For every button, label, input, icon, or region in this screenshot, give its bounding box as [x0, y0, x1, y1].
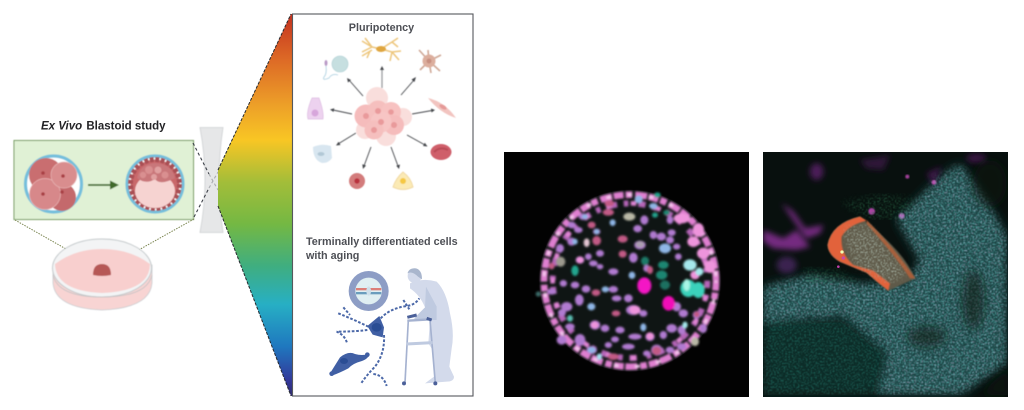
icon: blue epithelial cell [313, 145, 332, 163]
icon: yellow cell [393, 172, 413, 190]
panel: fate outcomes [292, 14, 473, 396]
panel: blastoid development box [14, 140, 194, 220]
icon: blastocyst in zona [127, 156, 183, 212]
speckled cells [763, 163, 1007, 395]
icon: degenerating neuron [337, 298, 419, 386]
icon: muscle cell [428, 98, 456, 118]
icon: stem cell cluster [354, 87, 412, 146]
purple streaks [763, 154, 987, 273]
rim dashes [544, 195, 716, 367]
aging illustration [329, 268, 454, 386]
icon: glial cell [419, 50, 441, 73]
pluripotency diagram [308, 38, 456, 190]
dotted lines: box to dish [15, 219, 194, 266]
dashed lines: box through lens [193, 143, 218, 217]
heading: Terminally differentiated cells with aging: with aging [305, 250, 359, 262]
bright magenta nuclei [637, 277, 651, 294]
dim tissue haze [763, 320, 887, 395]
arrow: development [88, 180, 119, 190]
icon: elderly man with walker [402, 268, 454, 385]
icon: red round cell [349, 173, 365, 189]
title: Ex Vivo Blastoid study: Ex Vivo Blastoid study [41, 120, 166, 132]
icon: damaged blue cell [329, 352, 370, 376]
icon: purple cell [308, 98, 323, 119]
icon: red blood cell [430, 144, 452, 160]
icon: egg and sperm [324, 56, 348, 79]
icon: microscope lens [200, 128, 223, 232]
spectrum funnel [218, 14, 293, 396]
icon: neuron [362, 38, 401, 61]
icon: membrane in cell [349, 271, 389, 311]
heading: Terminally differentiated cells with aging: Terminally differentiated cells [306, 236, 458, 248]
icon: morula in zona [26, 156, 82, 212]
icon: petri dish [52, 239, 152, 310]
dark folds [902, 160, 994, 353]
orange cone structure [828, 217, 915, 291]
arrows: differentiation [330, 66, 435, 169]
micrograph: blastoid fluorescence image [504, 152, 749, 397]
micrograph: embryo-like tissue fluorescence image [763, 152, 1008, 397]
heading: Pluripotency: Pluripotency [349, 22, 414, 34]
